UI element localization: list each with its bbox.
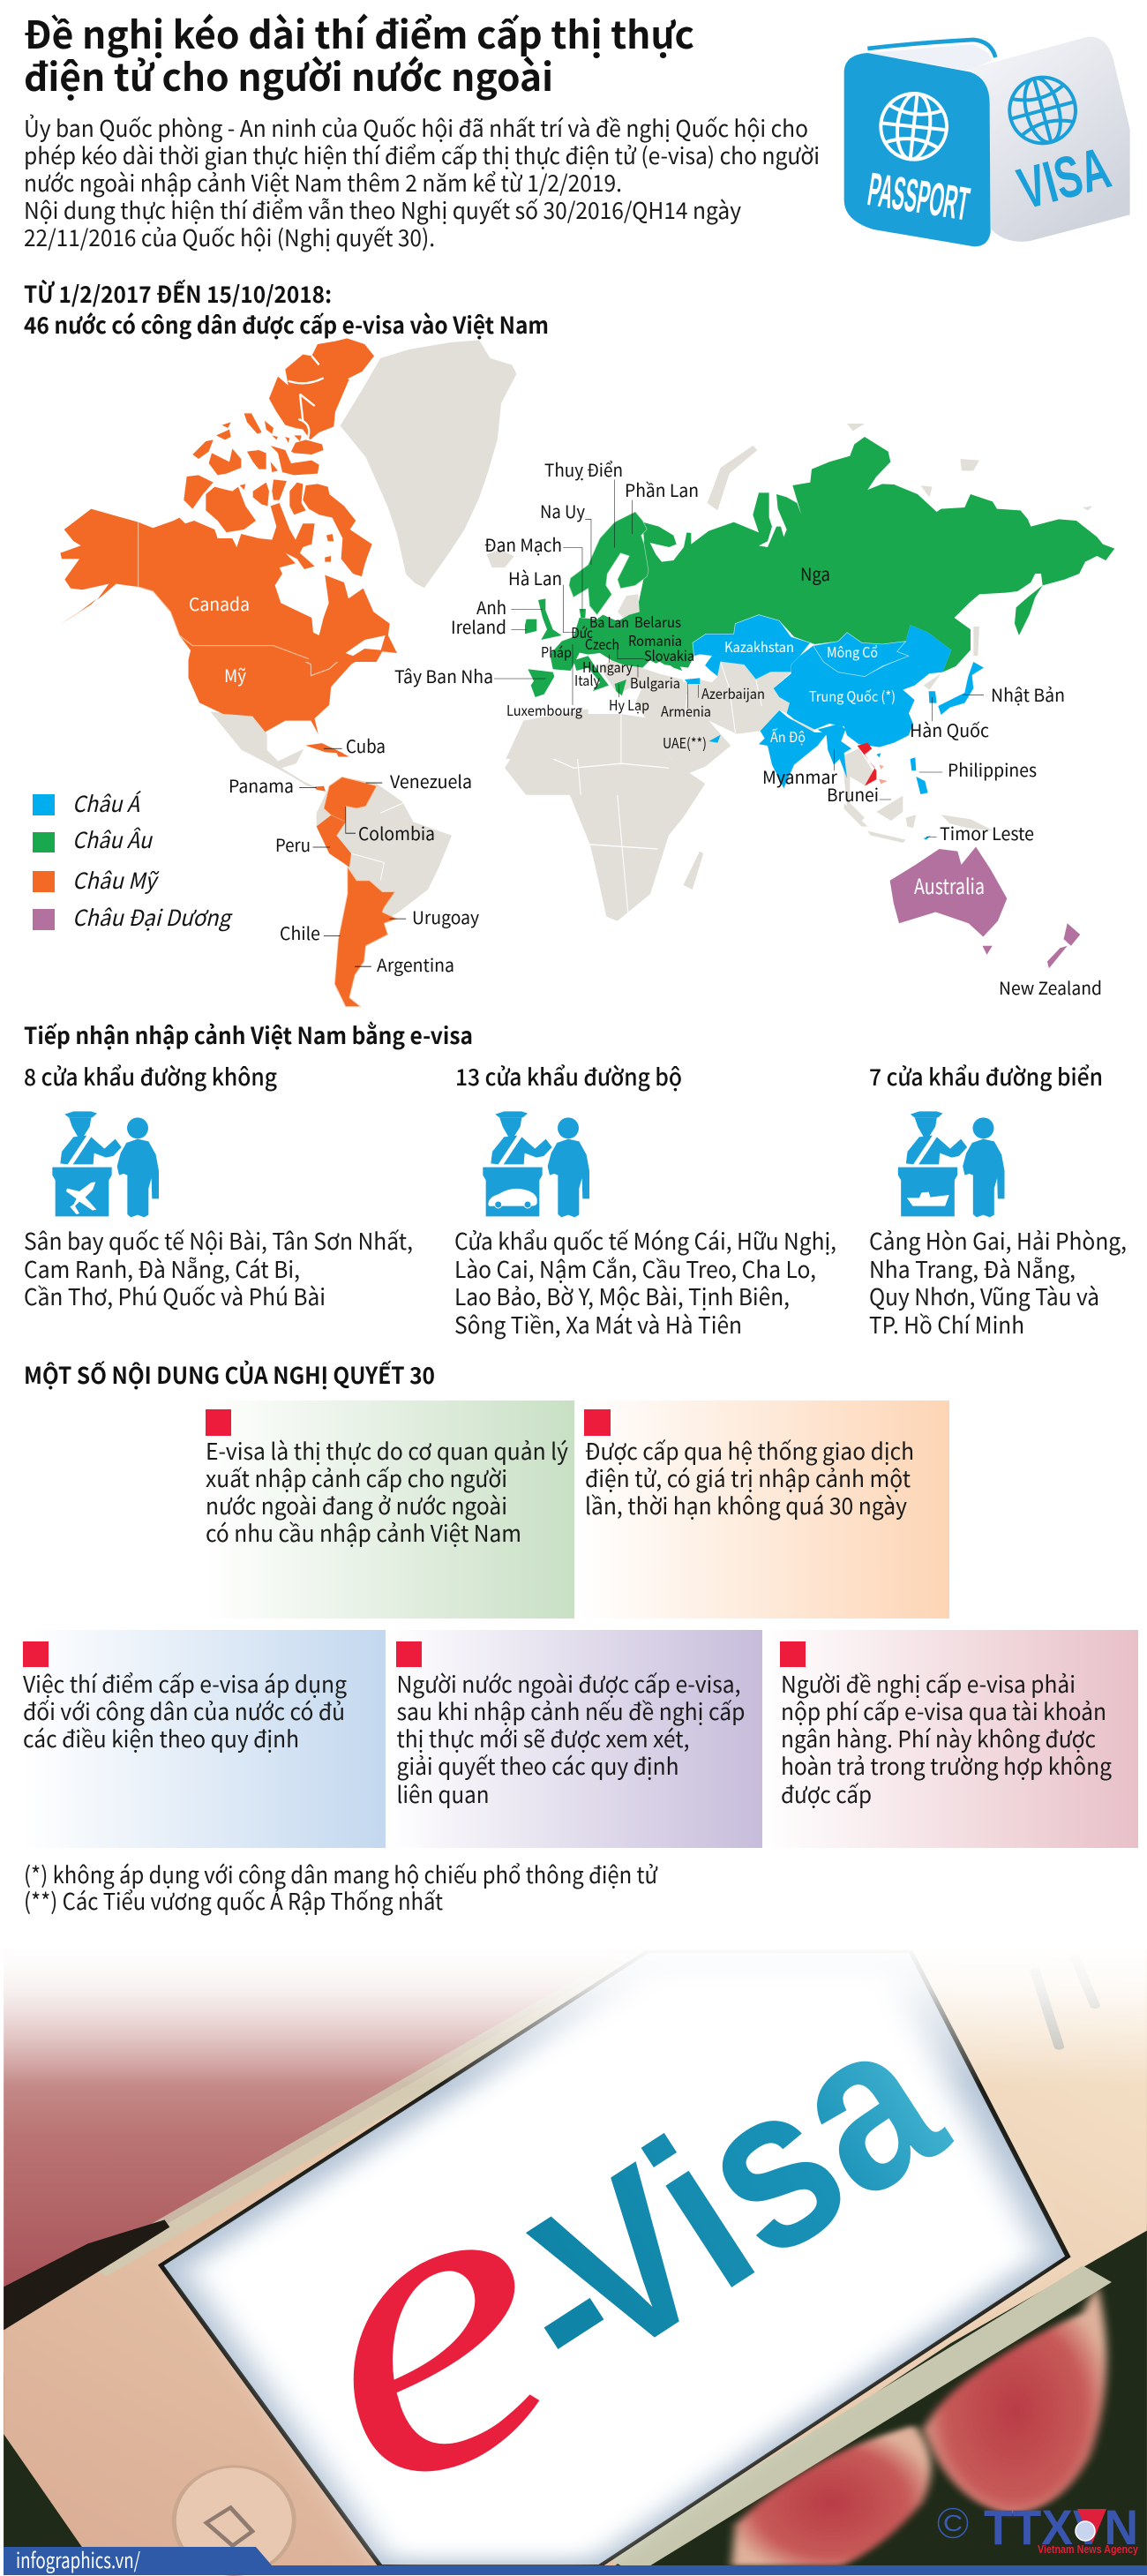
country labels: europe: Luxembourg bbox=[506, 699, 582, 720]
country labels: europe: Italy bbox=[574, 669, 601, 690]
country labels: europe: Phần Lan bbox=[625, 477, 699, 502]
column: sea bbox=[869, 1060, 1127, 1341]
lower finger bbox=[731, 2425, 931, 2566]
panel: new visa: liên quan bbox=[397, 1777, 489, 1810]
icon: sea officer bbox=[898, 1111, 1004, 1217]
panel: new visa: Người nước ngoài được cấp e-visa, bbox=[397, 1667, 741, 1700]
country labels: asia and oceania: New Zealand bbox=[999, 974, 1102, 1000]
arctic islands bbox=[708, 446, 757, 510]
sakhalin bbox=[973, 627, 979, 656]
gulf of st lawrence bbox=[346, 635, 386, 656]
column: air bbox=[24, 1060, 413, 1312]
panel: definition bbox=[206, 1401, 574, 1618]
panama bbox=[315, 786, 326, 792]
world map bbox=[33, 338, 1114, 1007]
south korea bbox=[929, 691, 937, 703]
panel: fee: hoàn trả trong trường hợp không bbox=[781, 1749, 1112, 1782]
country labels: asia and oceania: Trung Quốc (*) bbox=[809, 685, 896, 706]
caucasus bbox=[685, 678, 700, 684]
country labels: europe: Ireland bbox=[451, 613, 506, 639]
column: sea: Quy Nhơn, Vũng Tàu và bbox=[869, 1280, 1099, 1312]
panel: validity: lần, thời hạn không quá 30 ngày bbox=[585, 1489, 907, 1521]
north korea bbox=[924, 673, 941, 690]
panel: definition: xuất nhập cảnh cấp cho người bbox=[206, 1461, 507, 1494]
intro text bbox=[24, 111, 820, 253]
china bbox=[774, 625, 951, 747]
borders bbox=[139, 522, 309, 659]
panel: eligibility: đối với công dân của nước có đủ bbox=[23, 1694, 345, 1727]
country labels: europe: Hy Lạp bbox=[609, 694, 649, 715]
legend: Châu Á bbox=[72, 787, 141, 819]
map: africa and oceania bbox=[505, 714, 1080, 968]
photo: phone showing e-visa bbox=[0, 1942, 1147, 2576]
chile, argentina and uruguay bbox=[334, 867, 397, 1007]
column: land: Lao Bảo, Bờ Y, Mộc Bài, Tịnh Biên, bbox=[454, 1280, 790, 1312]
myanmar and north east india bbox=[818, 724, 851, 778]
panel: eligibility: các điều kiện theo quy định bbox=[23, 1722, 299, 1754]
column: sea: Nha Trang, Đà Nẵng, bbox=[869, 1252, 1076, 1285]
central europe bbox=[574, 612, 682, 671]
africa bbox=[505, 714, 705, 921]
panel: eligibility: Việc thí điểm cấp e-visa áp dụng bbox=[23, 1667, 347, 1700]
column: sea: 7 cửa khẩu đường biển bbox=[869, 1060, 1103, 1093]
icon: passport and visa: PASSPORT bbox=[865, 162, 973, 230]
north africa edge bbox=[506, 709, 588, 759]
top fade bbox=[0, 1942, 1147, 2085]
country labels: americas bbox=[189, 590, 480, 977]
baltics bbox=[618, 594, 640, 618]
map leader lines bbox=[494, 479, 699, 709]
country labels: americas: Argentina bbox=[377, 951, 454, 977]
country labels: europe: Tây Ban Nha bbox=[394, 663, 493, 688]
country labels: europe: Belarus bbox=[634, 611, 681, 632]
column: air: Sân bay quốc tế Nội Bài, Tân Sơn Nhất, bbox=[24, 1224, 413, 1257]
icon: land officer bbox=[483, 1111, 589, 1217]
phone body bbox=[4, 1949, 1147, 2566]
phone rim bbox=[95, 1951, 648, 2270]
country labels: europe: Bulgaria bbox=[630, 672, 680, 693]
country labels: asia and oceania: Philippines bbox=[948, 756, 1037, 782]
new zealand bbox=[1064, 923, 1080, 946]
country labels: asia and oceania: Hàn Quốc bbox=[910, 717, 989, 742]
ireland bbox=[525, 620, 536, 634]
country labels: americas: Mỹ bbox=[224, 662, 247, 687]
philippines bbox=[911, 757, 916, 770]
column: sea: TP. Hồ Chí Minh bbox=[869, 1308, 1024, 1341]
panel: definition: có nhu cầu nhập cảnh Việt Nam bbox=[206, 1516, 521, 1549]
south america borders bbox=[351, 801, 406, 881]
country labels: asia and oceania: Australia bbox=[914, 869, 985, 900]
panel: new visa bbox=[386, 1630, 762, 1848]
country labels: europe: Pháp bbox=[541, 641, 572, 662]
country labels: americas: Panama bbox=[229, 772, 294, 798]
country labels: asia and oceania: Mông Cổ bbox=[827, 641, 878, 662]
nepal bbox=[791, 719, 814, 732]
title: điện tử cho người nước ngoài bbox=[24, 48, 553, 102]
panel: validity bbox=[578, 1401, 949, 1618]
heading: resolution 30: MỘT SỐ NỘI DUNG CỦA NGHỊ QUYẾT 30 bbox=[24, 1358, 435, 1391]
australia bbox=[890, 846, 1007, 937]
uae bbox=[708, 735, 721, 743]
column: sea: Cảng Hòn Gai, Hải Phòng, bbox=[869, 1224, 1127, 1257]
vietnam bbox=[858, 743, 876, 786]
usa bbox=[189, 633, 366, 734]
panel: fee: nộp phí cấp e-visa qua tài khoản bbox=[781, 1694, 1106, 1727]
country labels: asia and oceania: Timor Leste bbox=[940, 820, 1034, 845]
hainan bbox=[876, 753, 881, 757]
logo text: e-Visa: - bbox=[469, 2187, 659, 2429]
intro text: Nội dung thực hiện thí điểm vẫn theo Nghị quyết số 30/2016/QH14 ngày bbox=[24, 193, 741, 226]
india bbox=[759, 710, 828, 788]
iceland bbox=[486, 550, 514, 567]
heading: period bbox=[24, 277, 549, 341]
country labels: europe: Slovakia bbox=[644, 644, 694, 665]
dark shadow bbox=[4, 2219, 169, 2330]
footer bar: infographics.vn/ bbox=[16, 2543, 140, 2574]
panel: validity: Được cấp qua hệ thống giao dịch bbox=[585, 1434, 914, 1467]
country labels: europe: Armenia bbox=[661, 700, 711, 721]
country labels: europe: Azerbaijan bbox=[701, 682, 765, 703]
country labels: americas: Canada bbox=[189, 590, 250, 616]
intro text: phép kéo dài thời gian thực hiện thí điểm cấp thị thực điện tử (e-visa) cho người bbox=[24, 139, 820, 171]
panel: fee: ngân hàng. Phí này không được bbox=[781, 1722, 1096, 1754]
panel: fee: được cấp bbox=[781, 1777, 872, 1810]
heading: period: TỪ 1/2/2017 ĐẾN 15/10/2018: bbox=[24, 277, 332, 310]
dark background bbox=[4, 2373, 117, 2566]
screen bbox=[161, 1951, 1068, 2566]
column: land bbox=[454, 1060, 836, 1341]
country labels: americas: Colombia bbox=[358, 820, 435, 845]
japan bbox=[938, 662, 984, 715]
icon: passport and visa bbox=[844, 37, 1130, 246]
title bbox=[24, 5, 694, 102]
kazakhstan bbox=[693, 615, 810, 680]
intro text: Ủy ban Quốc phòng - An ninh của Quốc hội đã nhất trí và đề nghị Quốc hội cho bbox=[24, 111, 808, 144]
mongolia bbox=[813, 633, 909, 677]
country labels: europe: Anh bbox=[476, 594, 506, 620]
country labels: europe: Romania bbox=[628, 629, 682, 650]
south america base bbox=[317, 777, 452, 921]
logo text: e-Visa bbox=[242, 1969, 982, 2576]
heading: period: 46 nước có công dân được cấp e-visa vào Việt Nam bbox=[24, 308, 549, 341]
footer bar bbox=[4, 2543, 1147, 2575]
country labels: asia and oceania: Myanmar bbox=[762, 763, 837, 789]
russia bbox=[635, 437, 1114, 672]
caspian sea bbox=[694, 656, 717, 682]
timor leste bbox=[924, 836, 931, 840]
denmark bbox=[580, 609, 586, 618]
country labels: americas: Venezuela bbox=[390, 768, 472, 793]
country labels: europe: Czech bbox=[585, 633, 619, 654]
legend: Châu Âu bbox=[72, 823, 154, 855]
country labels: asia and oceania: Brunei bbox=[827, 781, 879, 807]
country labels: europe: Đức bbox=[571, 621, 593, 642]
heading: entry by e-visa: Tiếp nhận nhập cảnh Việt Nam bằng e-visa bbox=[24, 1018, 473, 1051]
indochina and malay peninsula bbox=[843, 748, 876, 821]
country labels: americas: Chile bbox=[280, 920, 320, 945]
mainland canada and alaska bbox=[60, 503, 397, 662]
footnotes: (**) Các Tiểu vương quốc Ả Rập Thống nhất bbox=[24, 1884, 443, 1917]
panel: eligibility bbox=[22, 1630, 386, 1848]
balkans and turkey bbox=[600, 660, 688, 697]
italy bbox=[574, 656, 609, 691]
country labels: europe: Nga bbox=[800, 560, 830, 586]
column: land: Cửa khẩu quốc tế Móng Cái, Hữu Nghị, bbox=[454, 1224, 836, 1257]
intro text: nước ngoài nhập cảnh Việt Nam thêm 2 năm kể từ 1/2/2019. bbox=[24, 166, 622, 199]
country labels: europe bbox=[394, 456, 830, 753]
big finger bbox=[923, 2285, 1106, 2514]
country labels: asia and oceania: Ấn Độ bbox=[770, 725, 806, 747]
mexico and central america bbox=[210, 711, 319, 788]
country labels: europe: Na Uy bbox=[540, 498, 586, 523]
map: europe bbox=[506, 512, 688, 759]
intro text: 22/11/2016 của Quốc hội (Nghị quyết 30). bbox=[24, 221, 435, 253]
alaska peninsula bbox=[59, 598, 97, 625]
side buttons bbox=[1035, 1958, 1095, 2047]
uk bbox=[538, 598, 562, 640]
column: air: Cần Thơ, Phú Quốc và Phú Bài bbox=[24, 1280, 326, 1312]
madagascar bbox=[683, 852, 703, 890]
logo text: e-Visa: e bbox=[242, 2063, 608, 2576]
country labels: europe: Hungary bbox=[582, 656, 633, 677]
country labels: americas: Cuba bbox=[346, 732, 386, 758]
column: air: Cam Ranh, Đà Nẵng, Cát Bi, bbox=[24, 1252, 300, 1285]
logo: TTXVN: TTXVN bbox=[984, 2499, 1138, 2555]
panel: definition: nước ngoài đang ở nước ngoài bbox=[206, 1489, 507, 1521]
home button bbox=[174, 2467, 294, 2574]
country labels: europe: Hà Lan bbox=[508, 565, 562, 590]
country labels: europe: Đan Mạch bbox=[484, 531, 562, 557]
map: asia bbox=[635, 424, 1114, 843]
legend: Châu Mỹ bbox=[72, 864, 160, 896]
country labels: asia and oceania: Kazakhstan bbox=[724, 635, 794, 657]
scandinavia bbox=[569, 512, 648, 615]
column: land: Sông Tiền, Xa Mát và Hà Tiên bbox=[454, 1308, 742, 1341]
map: americas south of canada bbox=[189, 341, 516, 1007]
country labels: americas: Peru bbox=[275, 831, 311, 857]
icon: airport officer bbox=[52, 1111, 159, 1217]
venezuela and colombia bbox=[324, 777, 377, 822]
column: land: Lào Cai, Nậm Cắn, Cầu Treo, Cha Lo, bbox=[454, 1252, 816, 1285]
logo: TTXVN: C bbox=[943, 2510, 963, 2536]
country labels: asia and oceania bbox=[724, 635, 1102, 1000]
panel: validity: điện tử, có giá trị nhập cảnh một bbox=[585, 1461, 911, 1494]
panel: fee bbox=[762, 1630, 1138, 1848]
country labels: americas: Urugoay bbox=[412, 904, 480, 929]
legend: Châu Đại Dương bbox=[72, 901, 233, 933]
middle east and central asia bbox=[635, 662, 791, 777]
peru bbox=[317, 815, 351, 867]
panel: new visa: giải quyết theo các quy định bbox=[397, 1749, 679, 1782]
panel: fee: Người đề nghị cấp e-visa phải bbox=[781, 1667, 1076, 1700]
panel: new visa: sau khi nhập cảnh nếu đề nghị cấp bbox=[397, 1694, 745, 1727]
column: land: 13 cửa khẩu đường bộ bbox=[455, 1060, 682, 1093]
title: Đề nghị kéo dài thí điểm cấp thị thực bbox=[24, 5, 694, 60]
spain bbox=[528, 669, 554, 697]
kamchatka bbox=[1015, 585, 1043, 635]
country labels: europe: UAE(**) bbox=[663, 732, 707, 753]
country labels: asia and oceania: Nhật Bản bbox=[991, 681, 1065, 707]
paracel and spratly islands bbox=[880, 765, 884, 770]
islands of southeast asia bbox=[876, 796, 903, 821]
greece bbox=[615, 680, 626, 695]
legend bbox=[33, 787, 233, 933]
footnotes bbox=[24, 1858, 658, 1917]
greenland bbox=[341, 341, 516, 588]
country labels: europe: Ba Lan bbox=[589, 611, 629, 632]
us-canada border bbox=[192, 645, 348, 676]
caribbean bbox=[305, 743, 344, 754]
logo text: e-Visa: Visa bbox=[499, 1969, 982, 2407]
footnotes: (*) không áp dụng với công dân mang hộ chiếu phổ thông điện tử bbox=[24, 1858, 658, 1890]
panel: definition: E-visa là thị thực do cơ quan quản lý bbox=[206, 1434, 568, 1467]
panel: new visa: thị thực mới sẽ được xem xét, bbox=[397, 1722, 690, 1754]
country labels: europe: Thuỵ Điển bbox=[544, 456, 623, 482]
column: air: 8 cửa khẩu đường không bbox=[24, 1060, 277, 1093]
map: canada and alaska bbox=[59, 338, 397, 662]
france bbox=[550, 637, 580, 671]
